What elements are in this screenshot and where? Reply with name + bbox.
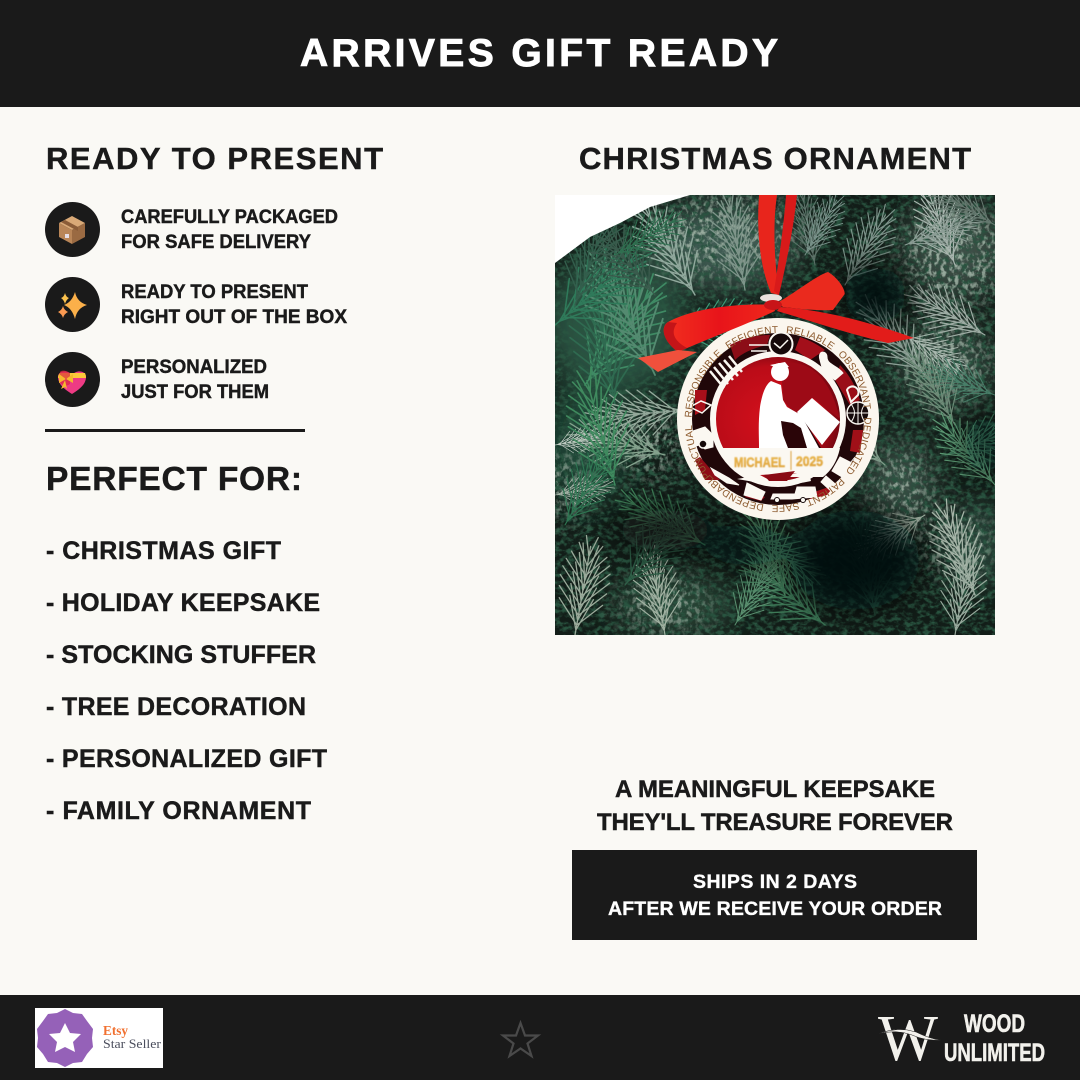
list: occasions: - PERSONALIZED GIFT (46, 745, 327, 773)
ornament: parcel (797, 398, 840, 445)
ornament: round wooden cutout (677, 318, 879, 520)
logo: wood unlimited (878, 1002, 1045, 1075)
photo: tonal foliage patches (545, 205, 1005, 630)
icon: package box (59, 216, 85, 244)
heading: christmas ornament: CHRISTMAS ORNAMENT (579, 141, 971, 176)
photo: needle texture (555, 195, 995, 635)
photo: white background corner (555, 195, 690, 263)
ornament: inner ring and red centre (710, 351, 846, 487)
ornament: name engraving (734, 451, 823, 470)
heading: perfect for: PERFECT FOR: (46, 461, 302, 498)
feature text: CAREFULLY PACKAGED (121, 207, 338, 228)
ornament: name engraving: MICHAEL (734, 454, 785, 470)
ornament: white base with name (723, 448, 840, 477)
ornament: dark band (692, 333, 864, 505)
title: ARRIVES GIFT READY (300, 32, 778, 75)
shipping callout: SHIPS IN 2 DAYS (693, 871, 857, 893)
feature text: PERSONALIZED (121, 357, 267, 378)
feature text (121, 207, 338, 253)
ornament: worker silhouette (759, 381, 819, 448)
ribbon: bow (638, 272, 914, 372)
photo: dark shadow pockets (615, 267, 1005, 610)
feature text (121, 357, 269, 403)
tagline: A MEANINGFUL KEEPSAKE (615, 776, 935, 803)
icon: outlined star (503, 1023, 538, 1056)
heading: ready to present: READY TO PRESENT (46, 141, 383, 176)
ornament: band icons (690, 332, 869, 502)
badge: etsy star seller: Etsy (103, 1023, 128, 1038)
footer bar (0, 995, 1080, 1080)
list: occasions: - CHRISTMAS GIFT (46, 537, 281, 565)
icon: sparkles (58, 292, 87, 319)
feature text: FOR SAFE DELIVERY (121, 232, 311, 253)
list: occasions: - HOLIDAY KEEPSAKE (46, 589, 320, 617)
ornament: engraved words: PUNCTUAL RESPONSIBLE EFFICIENT RELIABLE OBSERVANT DEDICATED PATIENT SAFE DEPENDABLE (684, 326, 872, 512)
feature text: READY TO PRESENT (121, 282, 308, 303)
list: occasions: - STOCKING STUFFER (46, 641, 316, 669)
list: occasions: - TREE DECORATION (46, 693, 306, 721)
photo: pine needles (555, 195, 995, 635)
ornament: truck frame shadow (781, 421, 821, 448)
logo: wood unlimited: W (878, 1002, 939, 1075)
shipping callout: AFTER WE RECEIVE YOUR ORDER (608, 898, 942, 920)
feature text: JUST FOR THEM (121, 382, 269, 403)
ribbon: hanging loop (758, 195, 797, 295)
logo: wood unlimited: WOOD (964, 1010, 1025, 1038)
tagline: THEY'LL TREASURE FOREVER (597, 809, 953, 836)
logo: wood unlimited: UNLIMITED (944, 1039, 1045, 1067)
feature text: RIGHT OUT OF THE BOX (121, 307, 347, 328)
feature: personalized (45, 352, 269, 407)
tagline (597, 776, 953, 836)
feature text (121, 282, 347, 328)
feature: carefully packaged (45, 202, 338, 257)
shipping callout (572, 850, 977, 940)
ornament: name engraving: 2025 (796, 453, 823, 469)
feature: ready to present (45, 277, 347, 332)
badge: etsy star seller (35, 1008, 163, 1068)
list: occasions: - FAMILY ORNAMENT (46, 797, 311, 825)
icon: gift heart (58, 371, 86, 394)
photo: ornament on pine branches (555, 195, 995, 635)
header banner (0, 0, 1080, 107)
list: occasions (46, 537, 327, 825)
badge: etsy star seller: Star Seller (103, 1036, 162, 1051)
